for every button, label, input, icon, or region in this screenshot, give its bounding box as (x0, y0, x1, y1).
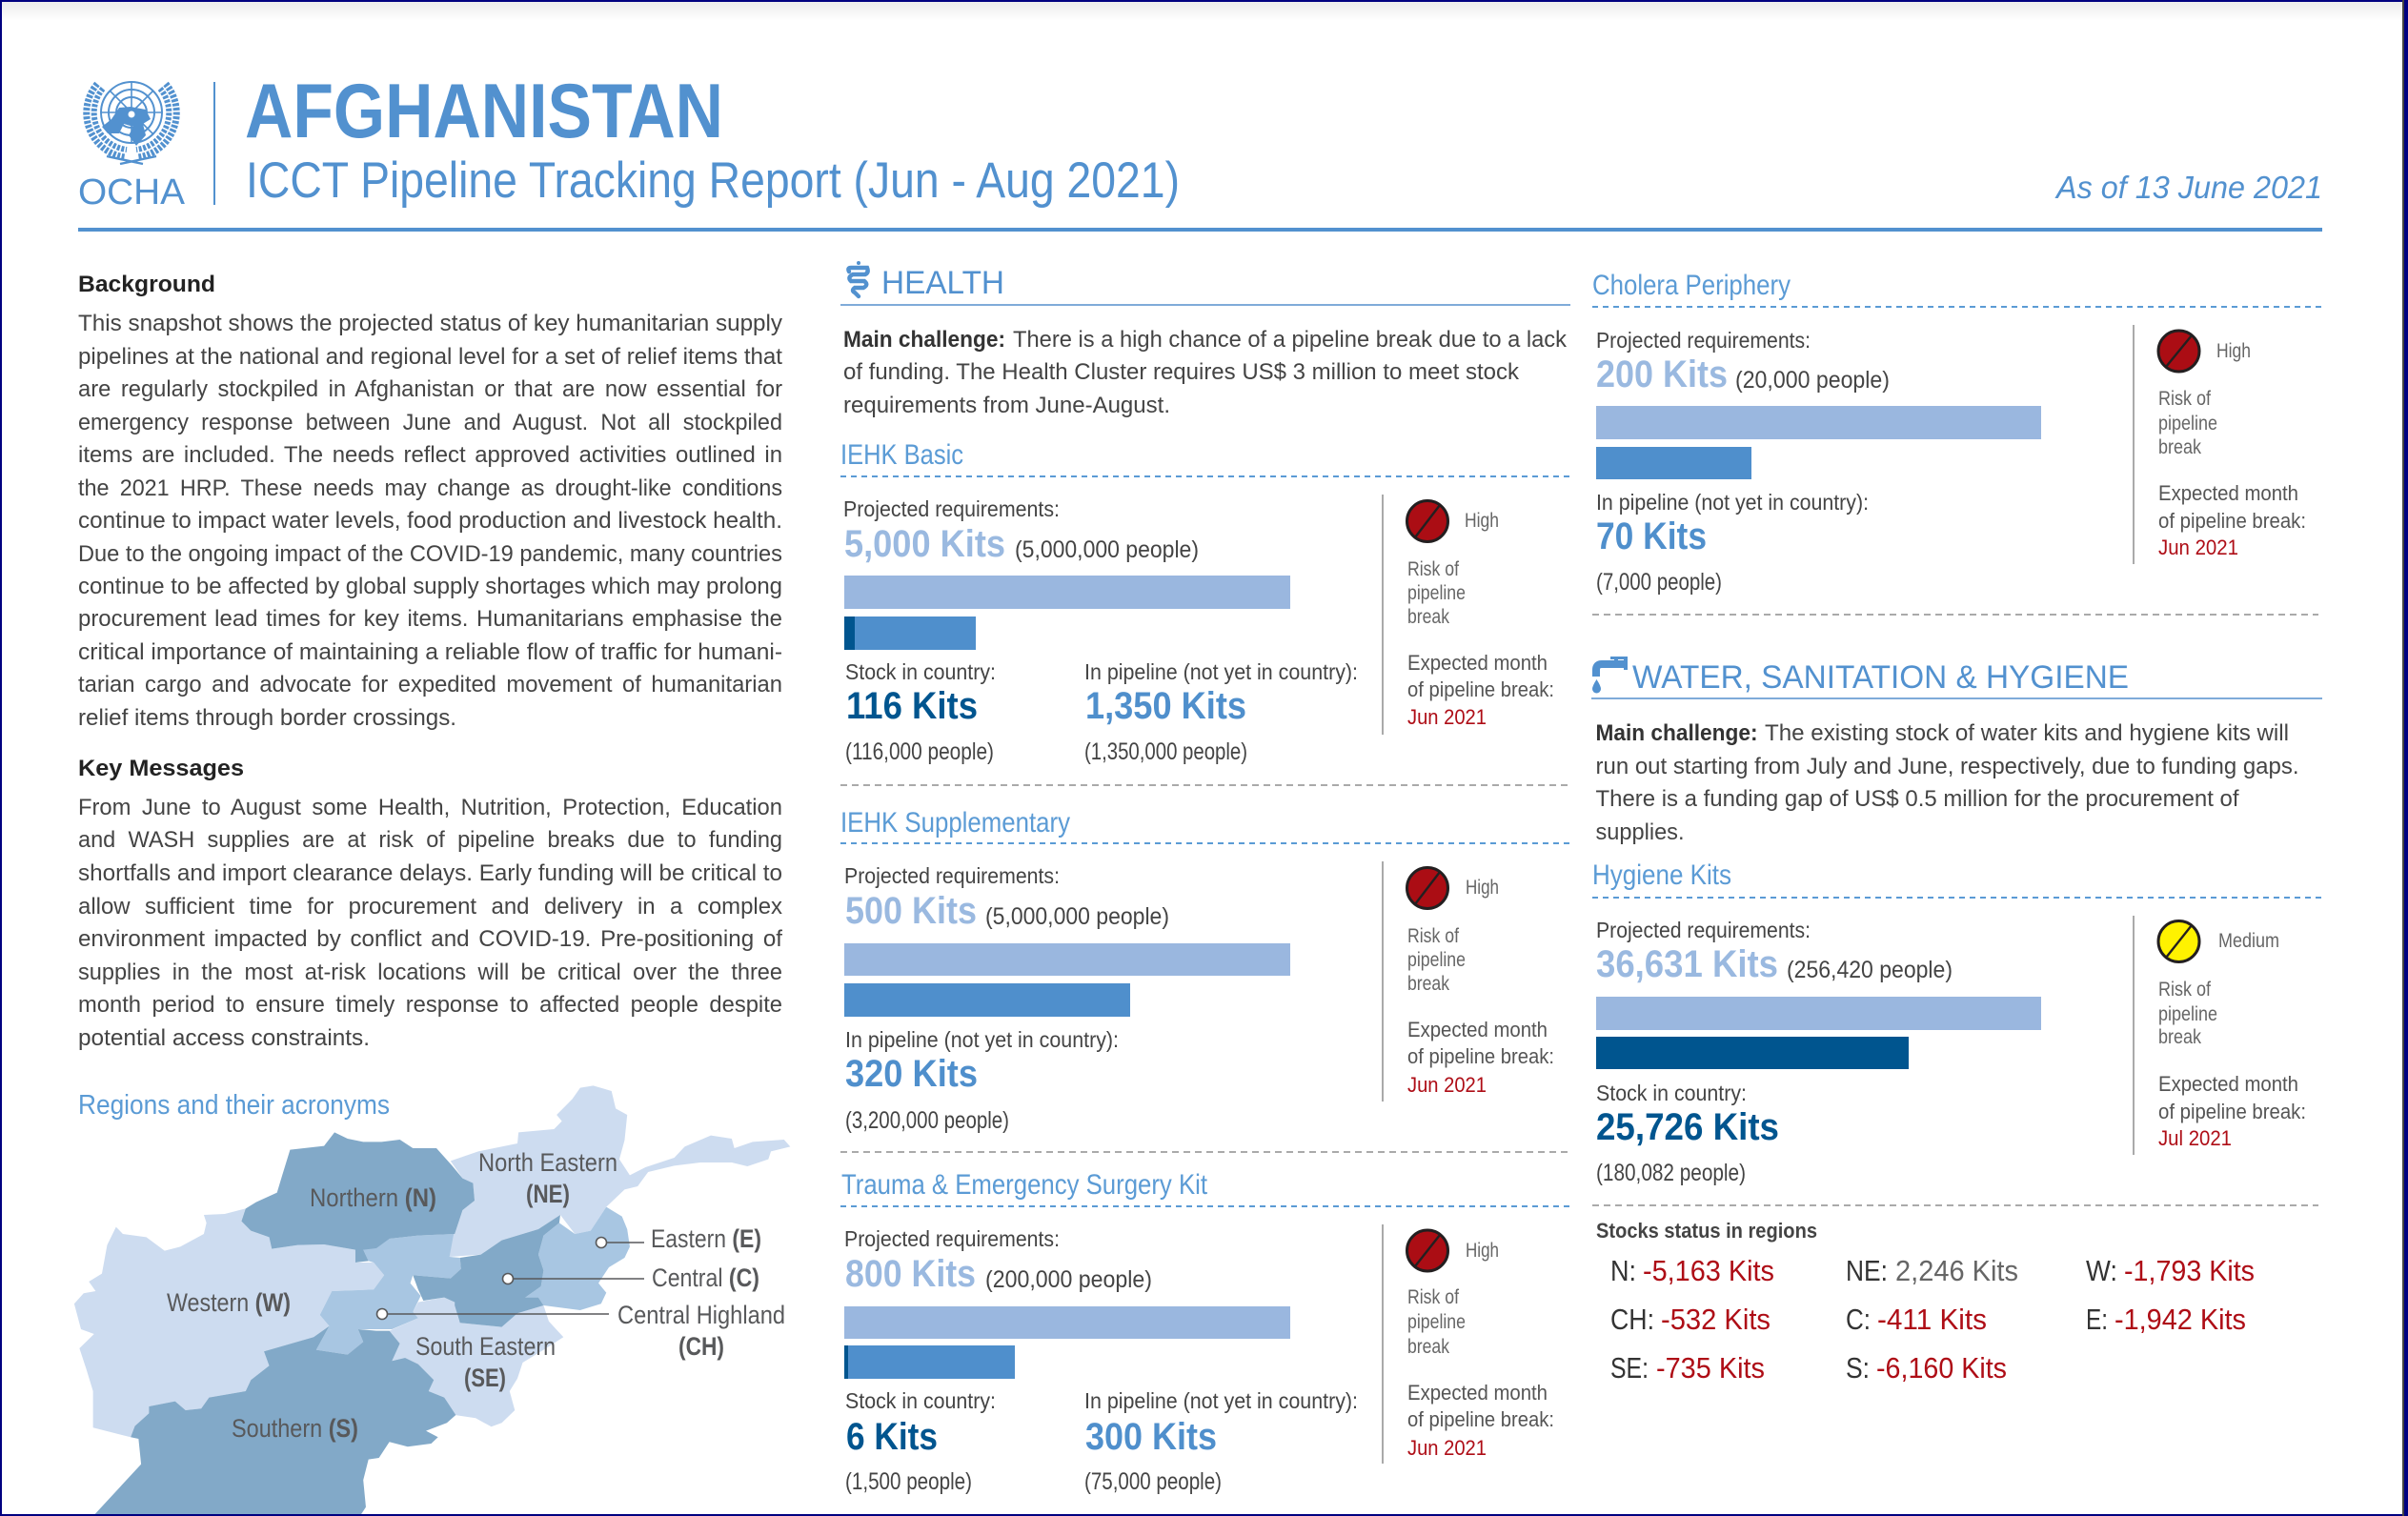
risk panel: medium (2158, 920, 2306, 1150)
heading: stocks status: Stocks status in regions (1596, 1219, 1817, 1243)
icon: high risk marker (1406, 1230, 1448, 1271)
heading: regions and their acronyms: Regions and their acronyms (78, 1090, 390, 1121)
risk panel: high: Expected month (2158, 481, 2298, 505)
text block: key messages body: environment impacted by conflict and COVID-19. Pre-positioning of (78, 926, 782, 952)
text block: health main challenge: Main challenge: (843, 327, 1005, 353)
risk panel: medium: Medium (2218, 930, 2279, 952)
icon: high risk marker (2158, 331, 2199, 372)
text block: background body: the 2021 HRP. These needs may change as drought-like conditions (78, 475, 782, 501)
in pipeline figure: (75,000 people) (1084, 1468, 1222, 1495)
stock in country figure: (180,082 people) (1596, 1160, 1746, 1186)
map labels: (CH) (678, 1332, 724, 1361)
regional stock figures: E: (2086, 1303, 2108, 1336)
text block: background body: pipelines at the national and regional level for a set of relief items that (78, 344, 782, 370)
OCHA wordmark: OCHA (78, 172, 186, 212)
panel: IEHK Basic (840, 439, 1572, 765)
map labels (167, 1148, 785, 1443)
risk panel: high: of pipeline break: (1407, 677, 1554, 701)
risk panel: medium: of pipeline break: (2158, 1100, 2306, 1123)
regional stock figures: N: (1610, 1254, 1636, 1287)
heading: IEHK Supplementary: IEHK Supplementary (840, 807, 1070, 839)
text block: background body: continue to impact water levels, food production and livestock health. (78, 508, 782, 534)
regional stock figures: C: (1846, 1303, 1871, 1336)
text block: key messages body: allow sufficient time for procurement and delivery in a complex (78, 894, 782, 920)
regional stock figures: -1,793 Kits (2124, 1254, 2255, 1287)
text block: key messages body: month period to ensure timely response to affected people despite (78, 992, 782, 1018)
projected requirements figure: Projected requirements: (1596, 918, 1811, 942)
panel: background text (78, 272, 783, 731)
projected requirements figure: Projected requirements: (844, 863, 1060, 888)
text block: key messages body: potential access constraints. (78, 1025, 370, 1051)
risk panel: high: Jun 2021 (1407, 705, 1487, 729)
text block: background body: emergency response between June and August. Not all stockpiled (78, 410, 782, 435)
risk panel: high: pipeline (1407, 949, 1466, 971)
map labels: Southern (S) (232, 1414, 358, 1443)
map labels: (NE) (526, 1180, 570, 1208)
regional stock figures: -411 Kits (1877, 1303, 1987, 1336)
icon: medium risk marker (2158, 920, 2199, 962)
map: Afghanistan regions (74, 1085, 790, 1515)
text block: WASH main challenge: There is a funding gap of US$ 0.5 million for the procurement of (1595, 786, 2239, 812)
stock in country figure: 6 Kits (846, 1416, 938, 1458)
regional stock figures: -735 Kits (1656, 1351, 1765, 1385)
heading: HEALTH: HEALTH (881, 265, 1004, 301)
regional stock figures: CH: (1610, 1303, 1654, 1336)
regional stock figures: -5,163 Kits (1643, 1254, 1774, 1287)
in pipeline figure (845, 1027, 1119, 1134)
text block: health main challenge (843, 327, 1568, 418)
risk panel: medium: break (2158, 1026, 2201, 1048)
bar chart: requirements vs stock and pipeline (844, 1306, 1290, 1379)
risk panel: high: of pipeline break: (1407, 1044, 1554, 1068)
map labels: North Eastern (478, 1148, 617, 1177)
risk panel: high: Risk of (1407, 558, 1459, 580)
map shapes (74, 1085, 790, 1515)
regional stock figures: NE: (1846, 1254, 1888, 1287)
risk panel: high: High (1466, 877, 1499, 899)
text block: WASH main challenge: Main challenge: (1595, 720, 1757, 746)
in pipeline figure (1596, 490, 1869, 596)
projected requirements figure (844, 1226, 1152, 1295)
risk panel: high: break (1407, 606, 1449, 628)
risk panel: high: Risk of (1407, 925, 1459, 947)
projected requirements figure: 36,631 Kits (1596, 943, 1778, 985)
heading: Key Messages: Key Messages (78, 756, 244, 781)
projected requirements figure: 5,000 Kits (844, 523, 1005, 565)
report date: As of 13 June 2021 (2054, 170, 2322, 205)
projected requirements figure: (256,420 people) (1787, 957, 1953, 983)
in pipeline figure: In pipeline (not yet in country): (1084, 1388, 1358, 1413)
heading: IEHK Basic: IEHK Basic (840, 439, 963, 471)
risk panel: high: High (1465, 510, 1499, 532)
subtitle: ICCT Pipeline Tracking Report (Jun - Aug 2021) (246, 152, 1180, 209)
text block: background body: procurement lead times for key items. Humanitarians emphasise the (78, 606, 782, 632)
regional stock figures: S: (1846, 1351, 1870, 1385)
risk panel: high: Risk of (2158, 388, 2211, 410)
map labels: (SE) (464, 1364, 506, 1392)
icon: high risk marker (1406, 501, 1448, 541)
panel: key messages (78, 756, 782, 1051)
in pipeline figure: In pipeline (not yet in country): (1596, 490, 1869, 515)
header: OCHA logo (78, 82, 186, 212)
text block: WASH main challenge: run out starting from July and June, respectively, due to funding gaps. (1595, 754, 2298, 779)
bar chart: requirements vs pipeline (1596, 406, 2041, 479)
in pipeline figure: In pipeline (not yet in country): (1084, 659, 1358, 684)
risk panel: high: break (1407, 973, 1449, 995)
text block: key messages body: supplies in the most at-risk locations will be critical over the three (78, 960, 782, 985)
text block: background body: This snapshot shows the projected status of key humanitarian supply (78, 311, 783, 336)
in pipeline figure (1084, 1388, 1358, 1495)
regional stock figures: 2,246 Kits (1895, 1254, 2018, 1287)
risk panel: high: Expected month (1407, 1381, 1548, 1405)
panel: Cholera Periphery (1592, 270, 2325, 596)
projected requirements figure (1596, 328, 1890, 395)
risk panel: high: Jun 2021 (1407, 1436, 1487, 1460)
risk panel: medium: Expected month (2158, 1072, 2298, 1096)
risk panel: high: Jun 2021 (2158, 536, 2238, 559)
regional stock figures: W: (2086, 1254, 2117, 1287)
in pipeline figure: 1,350 Kits (1085, 685, 1246, 727)
text block: health main challenge: requirements from June-August. (843, 393, 1170, 418)
map labels: Central Highland (617, 1301, 785, 1329)
projected requirements figure: 200 Kits (1596, 354, 1728, 395)
heading: Background: Background (78, 272, 215, 297)
risk panel: high: High (1466, 1240, 1499, 1262)
text block: key messages body (78, 795, 782, 1051)
projected requirements figure (843, 496, 1199, 565)
heading: Hygiene Kits: Hygiene Kits (1592, 859, 1731, 891)
callout lines (377, 1237, 644, 1319)
panel: health section (840, 261, 1570, 418)
icon: water tap (1592, 657, 1628, 694)
stock in country figure (845, 1388, 996, 1495)
bar chart: requirements vs stock and pipeline (844, 576, 1290, 650)
stock in country figure: Stock in country: (1596, 1081, 1747, 1105)
risk panel: high: pipeline (1407, 582, 1466, 604)
map labels: Western (W) (167, 1288, 291, 1317)
in pipeline figure: (7,000 people) (1596, 569, 1722, 596)
regional stock figures: -1,942 Kits (2115, 1303, 2246, 1336)
regional stock figures (1610, 1254, 2255, 1385)
map labels: Central (C) (652, 1263, 759, 1292)
regional stock figures: SE: (1610, 1351, 1649, 1385)
panel: Hygiene Kits (1592, 859, 2325, 1186)
panel: IEHK Supplementary (840, 807, 1572, 1134)
projected requirements figure: (5,000,000 people) (985, 903, 1169, 930)
regional stock figures: -532 Kits (1661, 1303, 1771, 1336)
stock in country figure: (116,000 people) (845, 738, 994, 765)
projected requirements figure (844, 863, 1169, 932)
risk panel: high: pipeline (2158, 413, 2217, 435)
projected requirements figure: Projected requirements: (1596, 328, 1811, 353)
stock in country figure (845, 659, 996, 765)
map labels: South Eastern (415, 1332, 556, 1361)
risk panel: high: Risk of (1407, 1286, 1459, 1308)
text block: health main challenge: There is a high chance of a pipeline break due to a lack (1013, 327, 1568, 353)
projected requirements figure (1596, 918, 1953, 985)
stock in country figure (1596, 1081, 1779, 1186)
text block: WASH main challenge: supplies. (1595, 819, 1685, 845)
in pipeline figure: (1,350,000 people) (1084, 738, 1247, 765)
text block: background body: critical importance of maintaining a reliable flow of traffic for humani- (78, 639, 782, 665)
risk panel: high: break (2158, 436, 2201, 458)
text block: background body: relief items through border crossings. (78, 705, 456, 731)
text block: WASH main challenge (1595, 720, 2298, 845)
risk panel: high: break (1407, 1336, 1449, 1358)
in pipeline figure: In pipeline (not yet in country): (845, 1027, 1119, 1052)
in pipeline figure: (3,200,000 people) (845, 1107, 1009, 1134)
stock in country figure: 116 Kits (846, 685, 978, 727)
risk panel: high: of pipeline break: (1407, 1407, 1554, 1431)
risk panel: high (2158, 331, 2306, 559)
text block: key messages body: and WASH supplies are at risk of pipeline breaks due to funding (78, 827, 782, 853)
panel: WASH section (1591, 657, 2322, 845)
panel: stocks status in regions (1596, 1219, 2255, 1385)
text block: background body: Due to the ongoing impact of the COVID-19 pandemic, many countries (78, 541, 782, 567)
risk panel: high (1406, 501, 1554, 729)
projected requirements figure: (200,000 people) (985, 1266, 1152, 1293)
projected requirements figure: 800 Kits (845, 1253, 976, 1295)
header divider (213, 82, 215, 205)
projected requirements figure: (20,000 people) (1735, 367, 1890, 394)
heading: water, sanitation and hygiene: WATER, SANITATION & HYGIENE (1632, 659, 2129, 696)
text block: WASH main challenge: The existing stock of water kits and hygiene kits will (1765, 720, 2289, 746)
projected requirements figure: (5,000,000 people) (1015, 536, 1199, 563)
in pipeline figure: 300 Kits (1085, 1416, 1217, 1458)
risk panel: high (1406, 1230, 1554, 1460)
risk panel: high: pipeline (1407, 1311, 1466, 1333)
regional stock figures: -6,160 Kits (1876, 1351, 2007, 1385)
heading: Trauma & Emergency Surgery Kit: Trauma & Emergency Surgery Kit (841, 1169, 1208, 1201)
projected requirements figure: Projected requirements: (843, 496, 1060, 521)
risk panel: medium: pipeline (2158, 1003, 2217, 1025)
icon: UN emblem (87, 82, 176, 164)
in pipeline figure: 320 Kits (845, 1053, 978, 1095)
heading: Cholera Periphery: Cholera Periphery (1592, 270, 1791, 301)
icon: health caduceus (848, 261, 868, 296)
risk panel: high: of pipeline break: (2158, 509, 2306, 533)
map labels: Northern (N) (310, 1183, 436, 1212)
risk panel: high: Expected month (1407, 651, 1548, 675)
bar chart: requirements vs stock (1596, 997, 2041, 1069)
text block: background body: tarian cargo and advocate for expedited movement of humanitarian (78, 672, 782, 697)
text block: background body: items are included. The needs reflect approved activities outlined in (78, 442, 782, 468)
risk panel: high: Expected month (1407, 1018, 1548, 1041)
text block: key messages body: shortfalls and import clearance delays. Early funding will be critical to (78, 860, 782, 886)
text block: background body: continue to be affected by global supply shortages which may prolong (78, 574, 782, 599)
risk panel: high: Jun 2021 (1407, 1073, 1487, 1097)
title: AFGHANISTAN (245, 69, 723, 154)
stock in country figure: Stock in country: (845, 1388, 996, 1413)
risk panel: medium: Jul 2021 (2158, 1126, 2232, 1150)
stock in country figure: (1,500 people) (845, 1468, 972, 1495)
map labels: Eastern (E) (651, 1224, 761, 1253)
risk panel: medium: Risk of (2158, 979, 2211, 1001)
text block: key messages body: From June to August some Health, Nutrition, Protection, Education (78, 795, 782, 820)
projected requirements figure: 500 Kits (845, 890, 977, 932)
stock in country figure: 25,726 Kits (1596, 1106, 1779, 1148)
text block: health main challenge: of funding. The Health Cluster requires US$ 3 million to meet stock (843, 359, 1520, 385)
stock in country figure: Stock in country: (845, 659, 996, 684)
text block: background body (78, 311, 783, 731)
panel: Trauma and Emergency Surgery Kit (840, 1169, 1572, 1495)
icon: high risk marker (1406, 867, 1448, 909)
in pipeline figure (1084, 659, 1358, 765)
risk panel: high: High (2216, 340, 2251, 362)
text block: background body: are regularly stockpiled in Afghanistan or that are now essential for (78, 376, 782, 402)
risk panel: high (1406, 867, 1554, 1097)
bar chart: requirements vs pipeline (844, 943, 1290, 1017)
in pipeline figure: 70 Kits (1596, 515, 1707, 557)
projected requirements figure: Projected requirements: (844, 1226, 1060, 1251)
